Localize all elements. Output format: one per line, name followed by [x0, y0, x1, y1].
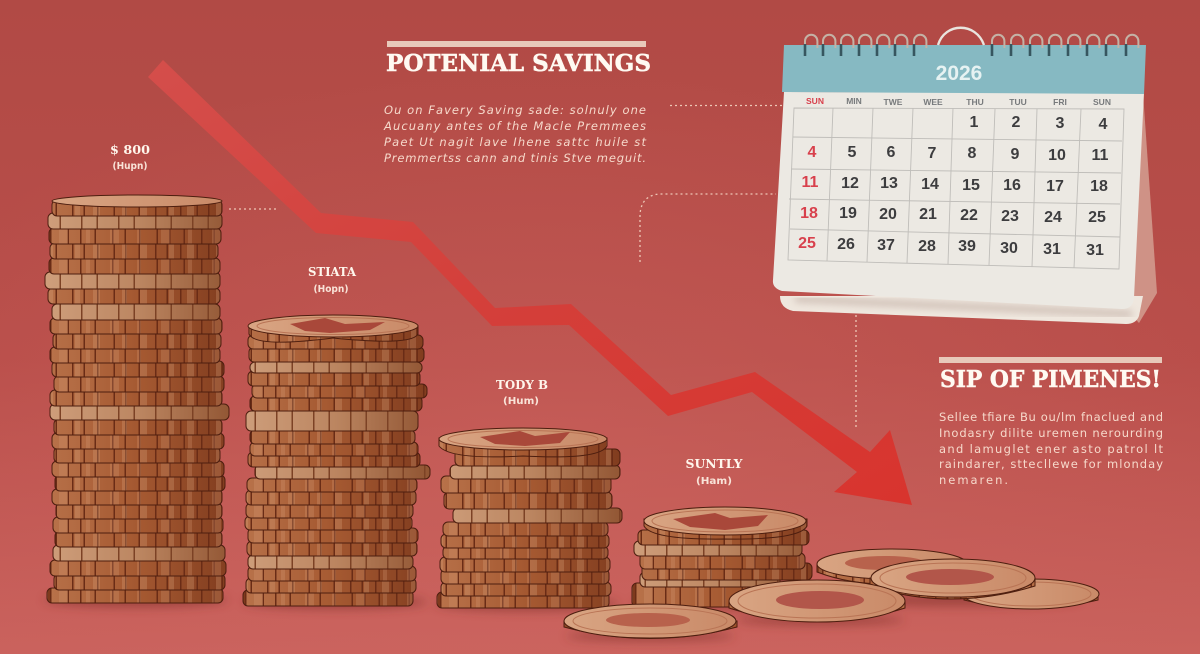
calendar dates: 12 — [841, 175, 859, 192]
calendar — [773, 28, 1157, 324]
calendar dates: 23 — [1001, 208, 1019, 225]
calendar dates: 9 — [1011, 146, 1020, 163]
stack label: STIATA: STIATA — [308, 265, 357, 279]
calendar dates: 3 — [1056, 115, 1065, 132]
calendar weekday row: SUN — [1093, 97, 1111, 107]
text block: sip of pimenes — [939, 410, 1163, 487]
coin stack 3 — [437, 428, 622, 608]
calendar weekday row: THU — [966, 97, 984, 107]
calendar dates: 19 — [839, 205, 857, 222]
text block: sip of pimenes: Sellee tfiare Bu ou/lm fnaclued and — [939, 410, 1163, 424]
calendar dates: 37 — [877, 237, 895, 254]
calendar dates: 16 — [1003, 177, 1021, 194]
calendar grid lines — [788, 108, 1124, 269]
calendar weekday row: TUU — [1009, 97, 1027, 107]
calendar dates: 25 — [1088, 209, 1106, 226]
text block: potential savings: Ou on Favery Saving sade: solnuly one — [384, 103, 646, 117]
text block: potential savings — [383, 103, 646, 165]
calendar dates: 11 — [1092, 147, 1109, 164]
calendar dates: 14 — [921, 176, 939, 193]
calendar dates: 18 — [1090, 178, 1108, 195]
loose coins — [564, 549, 1099, 638]
calendar dates: 21 — [919, 206, 937, 223]
calendar dates: 7 — [928, 145, 937, 162]
stack label: SUNTLY — [686, 457, 743, 487]
calendar weekday row — [806, 96, 1111, 107]
falling red arrow — [148, 60, 912, 505]
calendar dates: 4 — [808, 144, 817, 161]
stack shadows — [44, 593, 1080, 641]
heading: sip of pimenes: SIP OF PIMENES! — [940, 366, 1161, 393]
text block: potential savings: Aucuany antes of the Macle Premmees — [383, 119, 646, 133]
calendar dates — [798, 114, 1109, 259]
stack label: SUNTLY: (Ham) — [696, 476, 732, 487]
stack label: TODY B: TODY B — [496, 378, 548, 392]
dotted connector: stack to arrow — [229, 208, 279, 210]
calendar weekday row: FRI — [1053, 97, 1067, 107]
calendar dates: 30 — [1000, 240, 1018, 257]
calendar dates: 8 — [968, 145, 977, 162]
text block: sip of pimenes: nemaren. — [939, 473, 1008, 487]
calendar dates: 5 — [848, 144, 857, 161]
calendar header band: 2026 — [936, 62, 982, 85]
calendar dates: 25 — [798, 235, 816, 252]
text block: potential savings: Paet Ut nagit lave Ihene sattc huile st — [384, 135, 646, 149]
dotted connector: savings text to calendar — [670, 104, 782, 106]
calendar dates: 17 — [1046, 178, 1064, 195]
stack label: SUNTLY: SUNTLY — [686, 457, 743, 471]
coin stack 2 — [243, 315, 430, 606]
calendar weekday row: WEE — [923, 97, 943, 107]
calendar dates: 28 — [918, 238, 936, 255]
calendar dates: 6 — [887, 144, 896, 161]
text block: potential savings: Premmertss cann and tinis Stve meguit. — [384, 151, 646, 165]
coin stack 1 — [45, 195, 229, 603]
calendar binding rings — [805, 28, 1138, 56]
stack label: TODY B: (Hum) — [503, 396, 539, 407]
calendar dates: 13 — [880, 175, 898, 192]
calendar dates: 31 — [1086, 242, 1104, 259]
stack label: $ 800: (Hupn) — [112, 161, 148, 172]
stack label: $ 800: $ 800 — [110, 143, 150, 157]
calendar dates: 39 — [958, 238, 976, 255]
text block: sip of pimenes: Inodasry dilite uremen nerourding — [939, 426, 1163, 440]
calendar weekday row: TWE — [884, 97, 903, 107]
calendar dates: 24 — [1044, 209, 1062, 226]
calendar dates: 26 — [837, 236, 855, 253]
calendar weekday row: MIN — [846, 96, 862, 106]
calendar dates: 22 — [960, 207, 978, 224]
stack label: $ 800 — [110, 143, 150, 172]
dotted connector: curved calendar link — [640, 194, 776, 262]
calendar dates: 15 — [962, 177, 980, 194]
calendar dates: 31 — [1043, 241, 1061, 258]
coin stack 4 — [632, 507, 812, 607]
stack label: STIATA: (Hopn) — [314, 284, 348, 295]
calendar page — [773, 92, 1144, 309]
calendar weekday row: SUN — [806, 96, 824, 106]
heading: potential savings: POTENIAL SAVINGS — [386, 50, 651, 77]
calendar back pages — [780, 93, 1157, 324]
dotted connector: calendar to callout — [855, 305, 857, 428]
calendar dates: 10 — [1048, 147, 1066, 164]
stack label: STIATA — [308, 265, 357, 295]
text block: sip of pimenes: raindarer, sttecllewe for mlonday — [939, 457, 1163, 471]
calendar dates: 1 — [970, 114, 979, 131]
calendar dates: 11 — [802, 174, 819, 191]
calendar dates: 4 — [1099, 116, 1108, 133]
calendar header band — [782, 45, 1146, 94]
calendar dates: 18 — [800, 205, 818, 222]
text block: sip of pimenes: and lamuglet ener asto patrol lt — [939, 442, 1163, 456]
calendar dates: 20 — [879, 206, 897, 223]
calendar dates: 2 — [1012, 114, 1021, 131]
stack label: TODY B — [496, 378, 548, 407]
